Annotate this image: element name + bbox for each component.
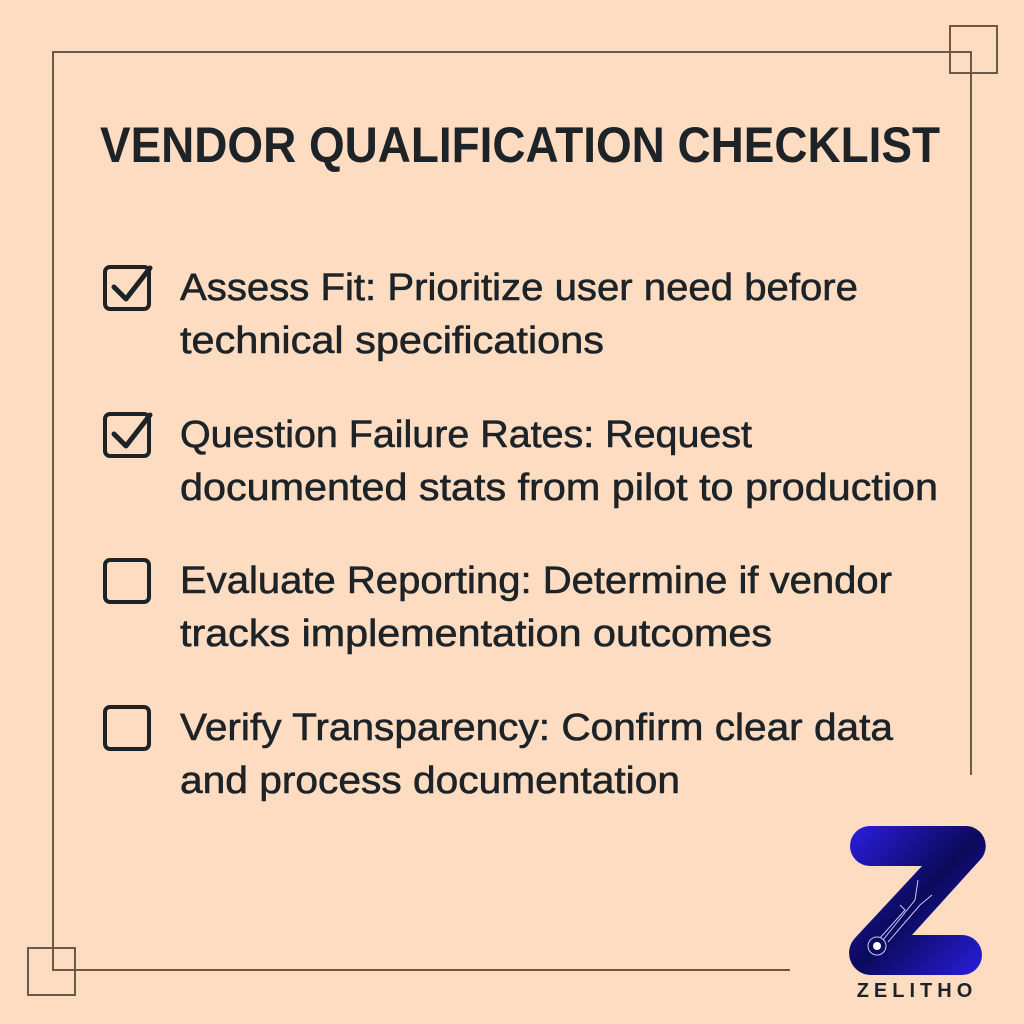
icon: checked box <box>105 414 150 456</box>
item 4: Verify Transparency: Confirm clear data <box>180 707 894 749</box>
item 4: and process documentation <box>180 760 680 802</box>
icon: empty box <box>105 707 149 749</box>
item 1: technical specifications <box>180 320 604 362</box>
title: VENDOR QUALIFICATION CHECKLIST <box>100 117 940 173</box>
item 3: Evaluate Reporting: Determine if vendor <box>180 560 892 602</box>
item 3: tracks implementation outcomes <box>180 613 772 655</box>
logo <box>849 826 986 1002</box>
item 2: documented stats from pilot to production <box>180 467 938 509</box>
item 1: Assess Fit: Prioritize user need before <box>180 267 858 309</box>
item 2: Question Failure Rates: Request <box>180 414 752 456</box>
icon: Z mark <box>849 826 986 975</box>
icon: empty box <box>105 560 149 602</box>
icon: checked box <box>105 267 150 309</box>
item 2 <box>105 414 938 509</box>
logo: ZELITHO <box>857 980 977 1002</box>
item 1 <box>105 267 858 362</box>
item 4 <box>105 707 894 802</box>
item 3 <box>105 560 892 655</box>
